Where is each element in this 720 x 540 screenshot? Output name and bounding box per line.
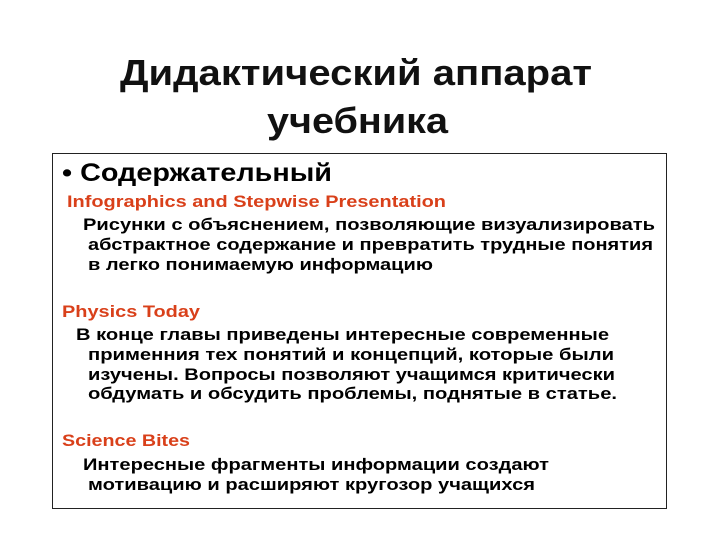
section: Infographics: Рисунки с объяснением, позволяющие визуализировать: [83, 215, 655, 234]
section: Science Bites: Интересные фрагменты информации создают: [83, 455, 549, 474]
title: учебника: [267, 100, 449, 141]
heading: Содержательный: • Содержательный: [62, 159, 332, 187]
section: Physics Today: обдумать и обсудить проблемы, поднятые в статье.: [88, 384, 617, 403]
section: Science Bites: [62, 431, 549, 494]
section: Infographics: абстрактное содержание и превратить трудные понятия: [88, 235, 653, 254]
title: [120, 52, 592, 141]
section: Science Bites: мотивацию и расширяют кругозор учащихся: [88, 475, 535, 494]
section: Physics Today: [62, 302, 617, 403]
section: Physics Today: В конце главы приведены интересные современные: [76, 325, 609, 344]
section: Physics Today: применния тех понятий и концепций, которые были: [88, 345, 614, 364]
section: Infographics: в легко понимаемую информацию: [88, 255, 433, 274]
section: Science Bites: Science Bites: [62, 431, 190, 450]
section: Physics Today: Physics Today: [62, 302, 201, 321]
section: Infographics: Infographics and Stepwise Presentation: [67, 192, 446, 211]
title: Дидактический аппарат: [120, 52, 592, 93]
section: Infographics: [67, 192, 655, 274]
panel: content box: [52, 154, 666, 508]
section: Physics Today: изучены. Вопросы позволяют учащимся критически: [88, 365, 615, 384]
